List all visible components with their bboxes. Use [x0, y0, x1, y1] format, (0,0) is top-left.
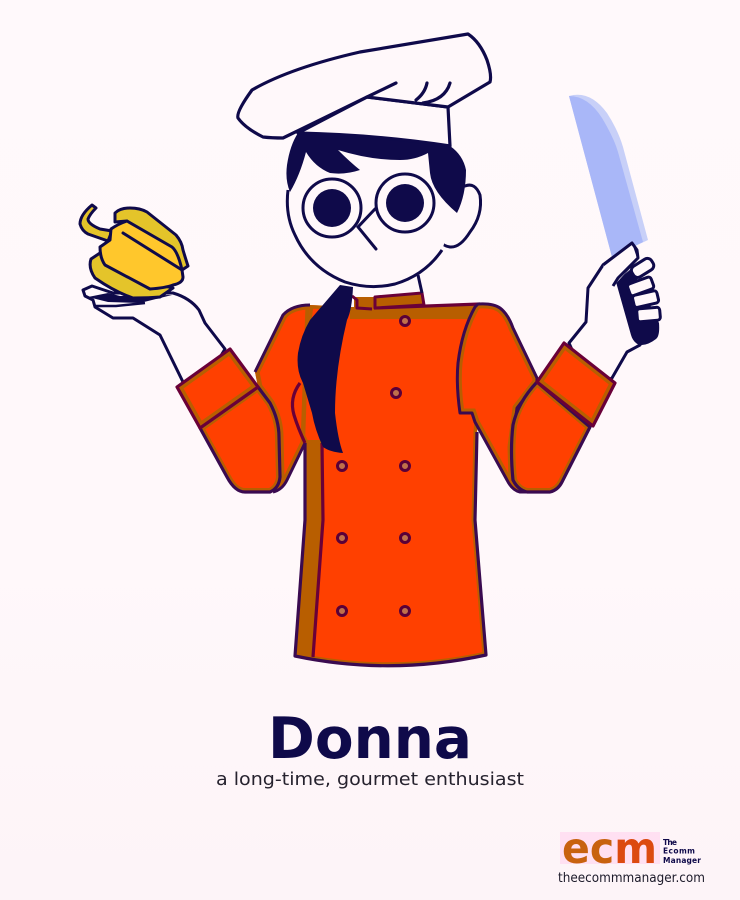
jacket left side fold [292, 383, 305, 443]
face [286, 135, 466, 287]
website url: theecommmanager.com [558, 871, 705, 886]
right arm and hand [569, 243, 640, 390]
left arm and hand [83, 286, 225, 390]
chef hat [238, 34, 491, 146]
ear [440, 185, 481, 247]
logo: ecm: Manager [663, 856, 701, 865]
neck [418, 275, 422, 293]
buttons [338, 316, 410, 616]
jacket body [292, 304, 486, 666]
icon: knife [569, 95, 661, 345]
heading: Donna: Donna [268, 706, 472, 772]
logo: ecm: Ecomm [663, 846, 695, 856]
logo: ecm: The [663, 838, 677, 847]
glasses [303, 174, 434, 249]
subtitle: a long-time, gourmet enthusiast [216, 769, 524, 790]
ponytail hair [298, 285, 353, 453]
hair fringe [286, 133, 466, 213]
logo: ecm [560, 824, 701, 874]
collar [352, 293, 424, 309]
left sleeve [177, 305, 310, 492]
right sleeve [457, 304, 615, 492]
icon: yellow bell pepper [80, 205, 188, 298]
logo: ecm: ecm [562, 824, 657, 874]
